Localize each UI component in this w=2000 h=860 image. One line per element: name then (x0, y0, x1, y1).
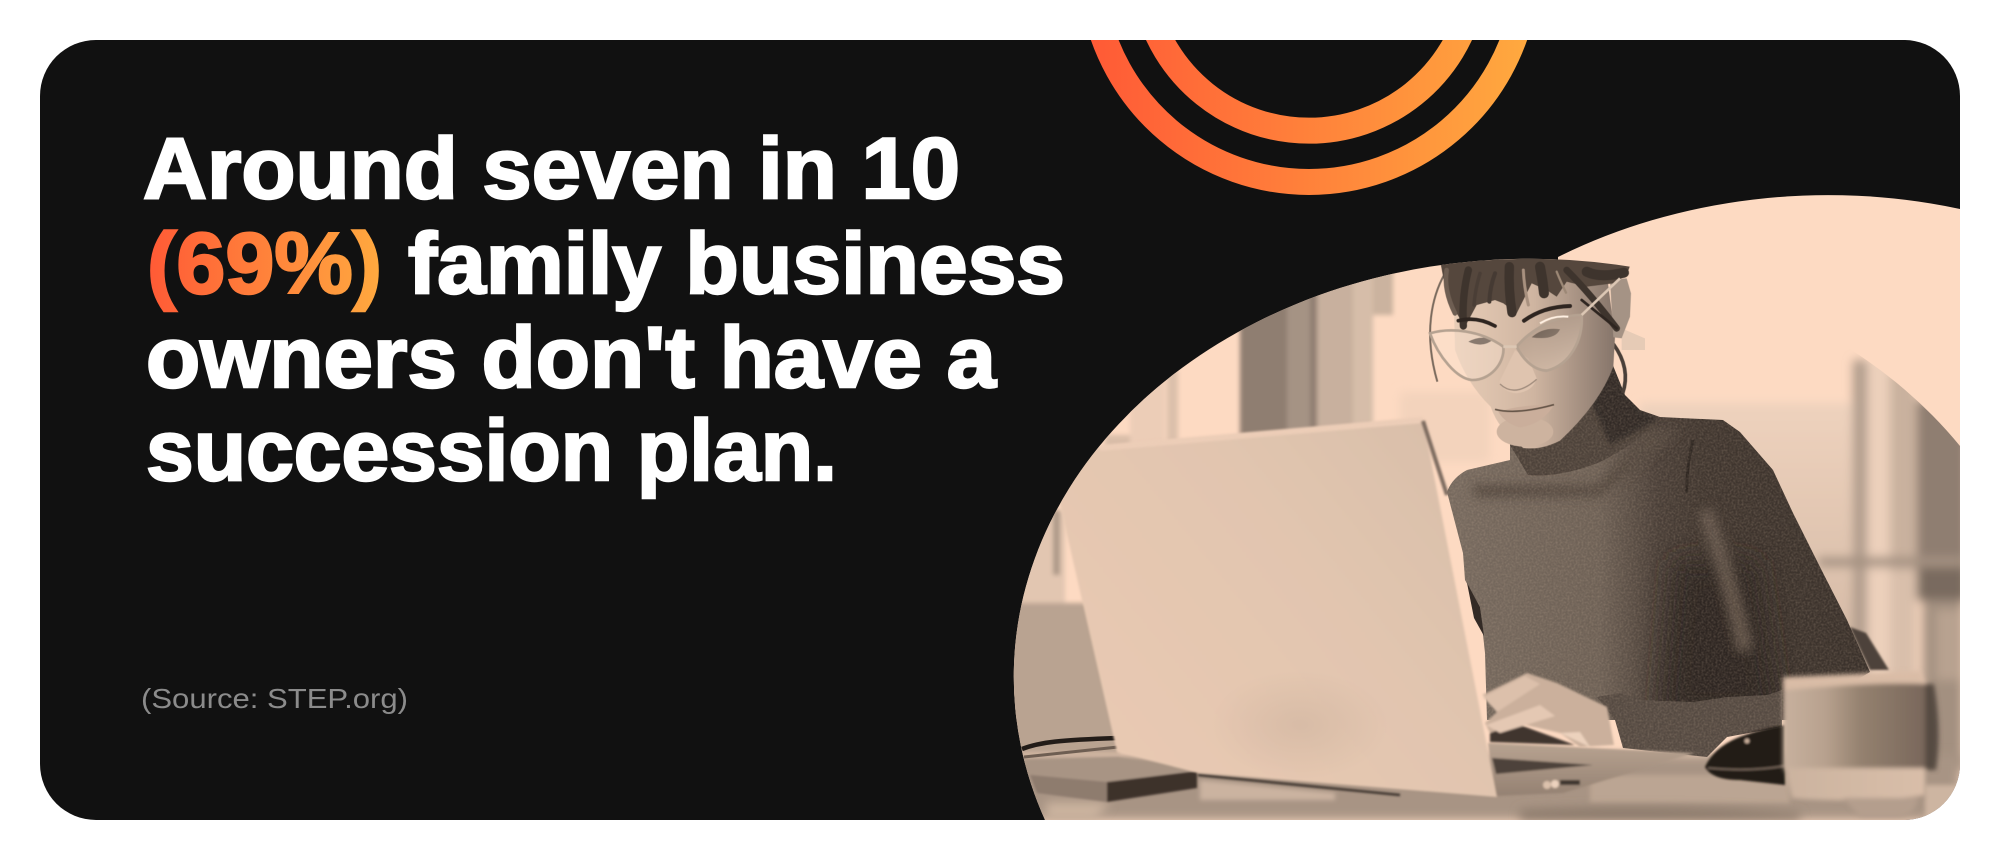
head and face (1430, 257, 1645, 449)
laptop base and keyboard (1488, 743, 1695, 796)
glasses (1430, 278, 1620, 380)
line 4: succession plan. (146, 403, 837, 499)
line 3: owners don't have a (146, 310, 997, 406)
mouth (1494, 404, 1554, 420)
highlighted percentage: (69%) (147, 216, 382, 312)
gap between arm and torso (1467, 583, 1484, 636)
lower face highlight (1496, 421, 1554, 447)
line 2: family business (408, 216, 1065, 312)
decorative concentric rings (1090, 40, 1528, 195)
eyebrows (1458, 306, 1570, 326)
photo: woman working on a laptop (1000, 250, 1967, 820)
eyes (1468, 329, 1560, 344)
ear (1610, 278, 1631, 338)
sweater (1440, 360, 1880, 725)
skin (1453, 273, 1615, 449)
hand on keyboard (1482, 673, 1614, 747)
back hair strand (1430, 273, 1445, 382)
hair strand behind neck (1613, 344, 1625, 393)
hair tie (1622, 328, 1645, 350)
hair and fringe (1439, 257, 1633, 328)
sleeve (1597, 690, 1782, 757)
source note: (Source: STEP.org) (141, 683, 408, 714)
peach background shape (1558, 195, 1960, 470)
chair (1850, 627, 1889, 670)
mouse (1705, 725, 1785, 785)
cable and hard drive (1022, 738, 1400, 802)
coffee mug (1783, 671, 1939, 817)
line 1: Around seven in 10 (143, 121, 960, 217)
desk surface (1010, 755, 1960, 820)
blurred office background (1005, 265, 1967, 770)
laptop lid (1048, 420, 1497, 797)
nose (1499, 350, 1537, 393)
headline (143, 121, 1065, 499)
